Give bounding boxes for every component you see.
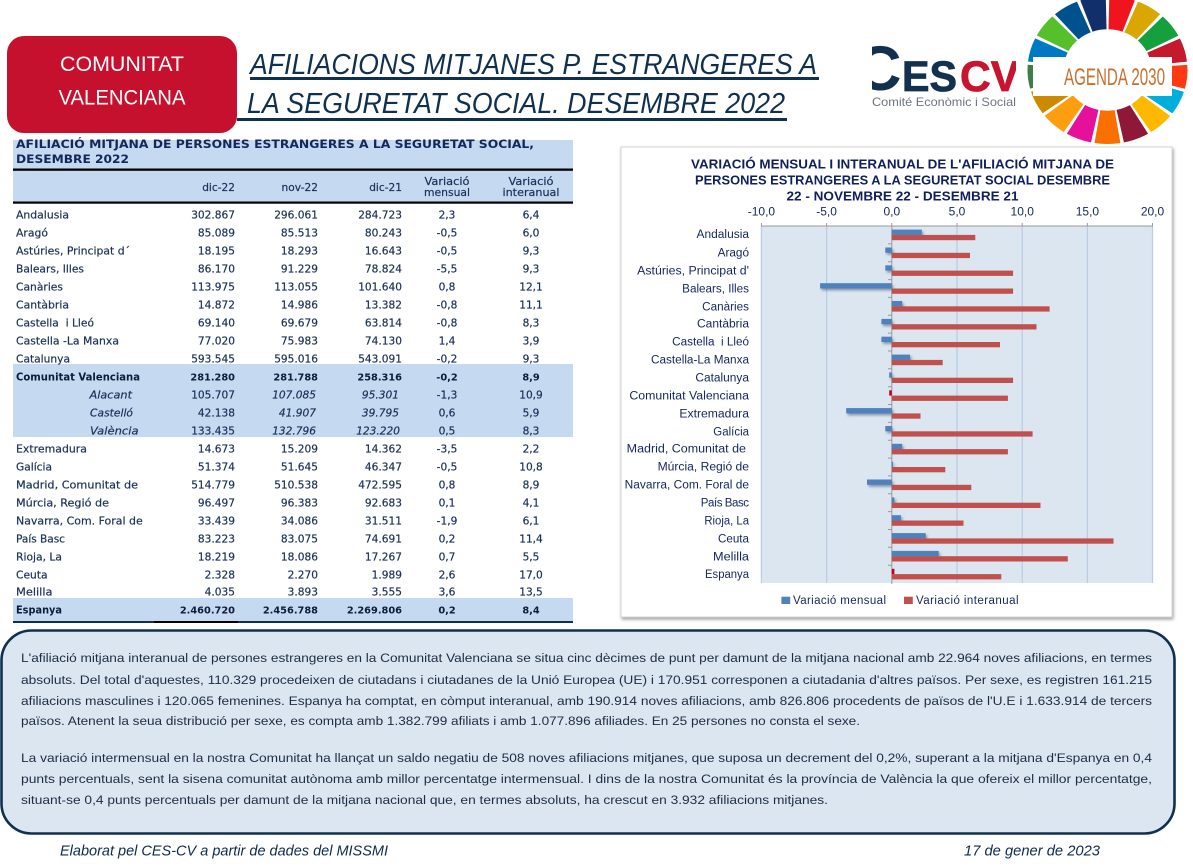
table heading: AFILIACIÓ MITJANA DE PERSONES ESTRANGERES A LA SEGURETAT SOCIAL, — [16, 138, 534, 151]
table values: variació interanual: 10,8 — [519, 462, 543, 474]
table heading — [16, 138, 534, 166]
table values: dic-21: 14.362 — [365, 444, 402, 456]
value axis labels: 20,0 — [1141, 204, 1165, 218]
value axis labels: -10,0 — [748, 204, 775, 218]
table row labels: Comunitat Valenciana — [16, 372, 140, 384]
category labels: Melilla — [713, 552, 750, 564]
table values: nov-22: 85.513 — [281, 228, 318, 240]
value axis labels — [748, 204, 1165, 218]
table row labels: Castelló — [90, 408, 134, 420]
table column headers: Variació — [508, 176, 554, 188]
table values: dic-22: 18.195 — [198, 246, 235, 258]
category labels: Galícia — [713, 426, 750, 438]
bars: variació interanual — [889, 235, 1114, 579]
paragraph 1: afiliacions masculines i 120.065 femenines. Espanya ha comptat, en còmput interanual, amb 190.914 noves afiliacions, amb 826.806 procedents de països de l'U.E i 1.633.914 de tercers — [21, 694, 1152, 708]
table bold rows: Comunitat Valenciana and Espanya — [180, 373, 540, 617]
table heading: DESEMBRE 2022 — [16, 153, 129, 166]
table values: dic-22: 4.035 — [205, 587, 235, 599]
table row labels: Astúries, Principat d´ — [16, 246, 130, 258]
table values: dic-22: 77.020 — [198, 336, 235, 348]
table values: nov-22: 15.209 — [281, 444, 318, 456]
table values: variació interanual: 8,9 — [523, 480, 539, 492]
table row labels: Espanya — [16, 605, 62, 617]
table values: variació mensual: -0,8 — [437, 318, 458, 330]
chart title: 22 - NOVEMBRE 22 - DESEMBRE 21 — [786, 190, 1019, 204]
table row labels: València — [90, 426, 139, 438]
paragraph 1 — [21, 651, 1152, 728]
value axis labels: 5,0 — [949, 204, 966, 218]
table values: dic-21: 46.347 — [365, 462, 402, 474]
value axis labels: 15,0 — [1076, 204, 1099, 218]
chart legend: Variació mensual — [793, 595, 886, 607]
table values: nov-22: 132.796 — [272, 426, 316, 438]
table values: variació mensual: -0,5 — [437, 462, 457, 474]
table values: nov-22: 75.983 — [281, 336, 318, 348]
logo: CES-CV: C — [856, 34, 902, 104]
bars: variació mensual — [820, 230, 939, 556]
value axis labels: 0,0 — [883, 204, 900, 218]
category labels: Astúries, Principat d' — [637, 266, 749, 278]
chart title: VARIACIÓ MENSUAL I INTERANUAL DE L'AFILIACIÓ MITJANA DE — [691, 156, 1114, 171]
category labels: Canàries — [702, 302, 749, 314]
table values: variació interanual — [519, 210, 543, 599]
table column headers: Variació — [424, 176, 470, 188]
table column headers: nov-22 — [282, 182, 318, 194]
chart title — [691, 156, 1114, 204]
category labels: Balears, Illes — [682, 284, 749, 296]
title: AFILIACIONS MITJANES P. ESTRANGERES A — [248, 49, 817, 81]
table values: dic-22: 69.140 — [198, 318, 235, 330]
chart legend: Variació interanual — [916, 595, 1018, 607]
category labels: Castella-La Manxa — [651, 355, 750, 367]
table row labels: Catalunya — [16, 354, 70, 366]
table values: nov-22: 34.086 — [281, 516, 318, 528]
table values: dic-22: 514.779 — [191, 480, 235, 492]
table values: dic-21: 3.555 — [372, 587, 402, 599]
paragraph 2 — [21, 751, 1152, 807]
table bold rows: Comunitat Valenciana and Espanya: 258.316 — [357, 373, 402, 384]
logo: CES-CV — [872, 46, 1016, 106]
panel: bar chart — [621, 147, 1172, 617]
table values: variació mensual: -0,5 — [437, 246, 457, 258]
table values: dic-22: 96.497 — [198, 498, 235, 510]
table values: dic-22: 593.545 — [191, 354, 235, 366]
table column headers: mensual — [424, 187, 470, 199]
table values: dic-22: 86.170 — [198, 264, 235, 276]
paragraph 1: L'afiliació mitjana interanual de persones estrangeres en la Comunitat Valenciana se situa cinc dècimes de punt per damunt de la mitjana nacional amb 22.964 noves afiliacions, en termes — [21, 651, 1152, 665]
table values: variació mensual: 0,8 — [439, 282, 456, 294]
badge: Comunitat Valenciana: VALENCIANA — [58, 86, 186, 110]
table values: dic-22: 133.435 — [191, 426, 235, 438]
paragraph 1: absoluts. Del total d'aquestes, 110.329 procedeixen de ciutadans i ciutadanes de la Unió Europea (UE) i 170.951 corresponen a ciutadania d'altres països. Per sexe, es registren 161.215 — [21, 673, 1152, 687]
table values: dic-22: 14.673 — [198, 444, 235, 456]
table values: nov-22: 296.061 — [274, 210, 318, 222]
logo: CES-CV: CV — [960, 54, 1020, 101]
table row labels: Rioja, La — [16, 552, 62, 564]
logo: CES-CV: Comité Econòmic i Social — [872, 95, 1016, 109]
table row labels: Balears, Illes — [16, 264, 84, 276]
table values: variació mensual: 0,1 — [439, 498, 455, 510]
table bold rows: Comunitat Valenciana and Espanya: 2.460.720 — [180, 606, 235, 617]
paragraph 2: situant-se 0,4 punts percentuals per damunt de la mitjana nacional que, en termes absoluts, ha crescut en 3.932 afiliacions mitjanes. — [21, 793, 828, 807]
table values: variació interanual: 9,3 — [523, 264, 539, 276]
table row labels: Canàries — [16, 282, 63, 294]
value axis labels: 10,0 — [1011, 204, 1034, 218]
table values: nov-22: 18.293 — [281, 246, 318, 258]
table values: dic-21: 39.795 — [362, 408, 399, 420]
table values: dic-22: 83.223 — [198, 534, 235, 546]
table row labels: Cantàbria — [16, 300, 69, 312]
table values: variació mensual: -0,8 — [437, 300, 458, 312]
table bold rows: Comunitat Valenciana and Espanya: 281.280 — [190, 373, 235, 384]
table values: variació interanual: 6,4 — [523, 210, 540, 222]
panel: data table — [13, 138, 573, 623]
table values: dic-21: 80.243 — [365, 228, 402, 240]
table bold rows: Comunitat Valenciana and Espanya: 281.788 — [273, 373, 318, 384]
table values: variació interanual: 9,3 — [523, 246, 539, 258]
table values: variació mensual: 0,6 — [439, 408, 456, 420]
table values: variació interanual: 6,0 — [523, 228, 540, 240]
table values: variació interanual: 11,1 — [519, 300, 543, 312]
table values: variació mensual: 2,3 — [439, 210, 455, 222]
category labels: Ceuta — [718, 534, 750, 546]
table values: variació mensual: -1,9 — [437, 516, 457, 528]
table values: dic-21: 1.989 — [372, 570, 402, 582]
table values: nov-22: 3.893 — [288, 587, 318, 599]
table row labels: Andalusia — [16, 210, 69, 222]
table values: dic-22: 105.707 — [191, 390, 235, 402]
table values: variació mensual: 0,7 — [439, 552, 455, 564]
footer: source: Elaborat pel CES-CV a partir de dades del MISSMI — [60, 842, 388, 860]
table bold rows: Comunitat Valenciana and Espanya: 8,4 — [522, 606, 540, 617]
paragraph 2: punts percentuals, sent la sisena comunitat autònoma amb millor percentatge intermensual. I dins de la nostra Comunitat és la província de València la que ofereix el millor percentatge, — [21, 772, 1152, 786]
table values: variació mensual: 0,8 — [439, 480, 456, 492]
table values: nov-22: 113.055 — [274, 282, 318, 294]
table values: dic-22: 18.219 — [198, 552, 235, 564]
category labels: Andalusia — [696, 229, 750, 241]
chart title: PERSONES ESTRANGERES A LA SEGURETAT SOCIAL DESEMBRE — [695, 173, 1110, 187]
table values: nov-22: 510.538 — [274, 480, 318, 492]
table values: variació interanual: 8,3 — [523, 318, 539, 330]
table values: variació mensual — [437, 210, 458, 599]
table values: variació interanual: 17,0 — [519, 570, 543, 582]
table values: dic-21: 13.382 — [365, 300, 402, 312]
badge: Comunitat Valenciana — [7, 36, 237, 133]
table values: dic-21: 74.691 — [365, 534, 402, 546]
table bold rows: Comunitat Valenciana and Espanya: 2.269.806 — [347, 606, 402, 617]
table column headers: dic-22 — [202, 182, 235, 194]
table values: nov-22: 51.645 — [281, 462, 318, 474]
table column headers — [202, 176, 560, 199]
table values: variació mensual: 0,2 — [439, 534, 455, 546]
value axis labels: -5,0 — [816, 204, 837, 218]
table values: variació interanual: 12,1 — [519, 282, 543, 294]
table column headers: interanual — [502, 187, 560, 199]
table values: dic-21: 284.723 — [358, 210, 402, 222]
title — [237, 49, 819, 121]
table values: dic-21: 95.301 — [362, 390, 399, 402]
logo: CES-CV: ES — [902, 54, 957, 101]
title: LA SEGURETAT SOCIAL. DESEMBRE 2022 — [247, 88, 785, 120]
table row labels: Navarra, Com. Foral de — [16, 516, 143, 528]
table row labels: Galícia — [16, 462, 52, 474]
icon: Agenda 2030 wheel — [1020, 0, 1193, 151]
table values: dic-22: 14.872 — [198, 300, 235, 312]
table row labels: Castella i Lleó — [16, 318, 94, 330]
table values: nov-22: 2.270 — [288, 570, 318, 582]
table row labels: Múrcia, Regió de — [16, 498, 109, 510]
table values: variació mensual: 2,6 — [439, 570, 456, 582]
table values: dic-22: 85.089 — [198, 228, 235, 240]
category labels: Extremadura — [679, 408, 750, 420]
table values: nov-22: 96.383 — [281, 498, 318, 510]
category labels: Catalunya — [695, 373, 750, 385]
table values: nov-22 — [272, 210, 318, 599]
table bold rows: Comunitat Valenciana and Espanya: 8,9 — [522, 373, 540, 384]
category labels: Cantàbria — [697, 319, 750, 331]
table values: variació interanual: 11,4 — [519, 534, 543, 546]
category labels: Comunitat Valenciana — [629, 391, 750, 403]
table values: variació interanual: 5,9 — [523, 408, 539, 420]
panel: commentary text — [2, 630, 1174, 834]
table values: variació interanual: 10,9 — [519, 390, 543, 402]
table row labels: Alacant — [88, 390, 133, 402]
category labels: Madrid, Comunitat de — [627, 444, 746, 456]
table values: dic-21: 17.267 — [365, 552, 402, 564]
table values: variació mensual: -0,5 — [437, 228, 457, 240]
table values: dic-21: 101.640 — [358, 282, 402, 294]
table values: variació mensual: -3,5 — [437, 444, 457, 456]
table values: variació mensual: 1,4 — [439, 336, 456, 348]
table row labels: País Basc — [16, 534, 65, 546]
footer: date: 17 de gener de 2023 — [964, 842, 1101, 860]
category labels: Múrcia, Regió de — [658, 462, 749, 474]
table values: dic-21: 31.511 — [365, 516, 402, 528]
table bold rows: Comunitat Valenciana and Espanya: -0,2 — [436, 373, 458, 384]
table values: variació mensual: -1,3 — [437, 390, 457, 402]
table values: dic-22: 113.975 — [191, 282, 235, 294]
table bold rows: Comunitat Valenciana and Espanya: 2.456.788 — [263, 606, 318, 617]
table values: variació mensual: 0,5 — [439, 426, 455, 438]
table values: variació mensual: -5,5 — [437, 264, 457, 276]
category labels: Aragó — [718, 248, 749, 260]
chart legend — [781, 595, 1018, 607]
table values: dic-22: 51.374 — [198, 462, 235, 474]
table values: variació interanual: 5,5 — [523, 552, 539, 564]
table values: dic-22: 33.439 — [198, 516, 235, 528]
table row labels: Melilla — [16, 587, 52, 599]
table values: dic-22 — [191, 210, 235, 599]
table values: nov-22: 107.085 — [272, 390, 316, 402]
table row labels: Aragó — [16, 228, 48, 240]
category labels: Castella i Lleó — [672, 337, 749, 349]
table row labels: Castella -La Manxa — [16, 336, 119, 348]
table values: dic-21 — [356, 210, 402, 599]
table values: dic-22: 2.328 — [205, 570, 235, 582]
paragraph 1: països. Atenent la seua distribució per sexe, es compta amb 1.382.799 afiliats i amb 1.077.896 afiliades. En 25 persones no consta el sexe. — [21, 714, 860, 728]
table values: dic-22: 42.138 — [198, 408, 235, 420]
table bold rows: Comunitat Valenciana and Espanya: 0,2 — [438, 606, 456, 617]
table values: nov-22: 18.086 — [281, 552, 318, 564]
table row labels: Ceuta — [16, 570, 48, 582]
badge: Comunitat Valenciana: COMUNITAT — [60, 53, 184, 76]
table values: dic-21: 123.220 — [356, 426, 400, 438]
table values: dic-21: 92.683 — [365, 498, 402, 510]
category labels: Espanya — [705, 569, 750, 581]
table values: dic-21: 16.643 — [365, 246, 402, 258]
table column headers: dic-21 — [369, 182, 402, 194]
table values: dic-21: 472.595 — [358, 480, 402, 492]
table values: nov-22: 91.229 — [281, 264, 318, 276]
table values: nov-22: 14.986 — [281, 300, 318, 312]
table values: variació interanual: 8,3 — [523, 426, 539, 438]
paragraph 2: La variació intermensual en la nostra Comunitat ha llançat un saldo negatiu de 508 noves afiliacions mitjanes, que suposa un decrement del 0,2%, superant a la mitjana d'Espanya en 0,4 — [21, 751, 1152, 765]
table values: variació interanual: 13,5 — [519, 587, 543, 599]
table values: dic-22: 302.867 — [191, 210, 235, 222]
category labels — [625, 229, 750, 581]
table values: nov-22: 595.016 — [274, 354, 318, 366]
table values: variació interanual: 3,9 — [523, 336, 539, 348]
table values: variació mensual: -0,2 — [437, 354, 457, 366]
category labels: País Basc — [701, 498, 749, 510]
table values: nov-22: 69.679 — [281, 318, 318, 330]
table values: dic-21: 63.814 — [365, 318, 402, 330]
table values: variació interanual: 2,2 — [523, 444, 539, 456]
table values: nov-22: 83.075 — [281, 534, 318, 546]
table values: dic-21: 78.824 — [365, 264, 402, 276]
plot area — [761, 226, 1152, 583]
category labels: Rioja, La — [704, 516, 750, 528]
category labels: Navarra, Com. Foral de — [625, 480, 749, 492]
table row labels: Madrid, Comunitat de — [16, 480, 138, 492]
table values: variació interanual: 6,1 — [523, 516, 539, 528]
table values: variació mensual: 3,6 — [439, 587, 456, 599]
table values: variació interanual: 4,1 — [523, 498, 539, 510]
table values: dic-21: 74.130 — [365, 336, 402, 348]
table values: nov-22: 41.907 — [279, 408, 316, 420]
table row labels — [16, 210, 143, 617]
table values: dic-21: 543.091 — [358, 354, 402, 366]
table row labels: Extremadura — [16, 444, 87, 456]
table values: variació interanual: 9,3 — [523, 354, 539, 366]
